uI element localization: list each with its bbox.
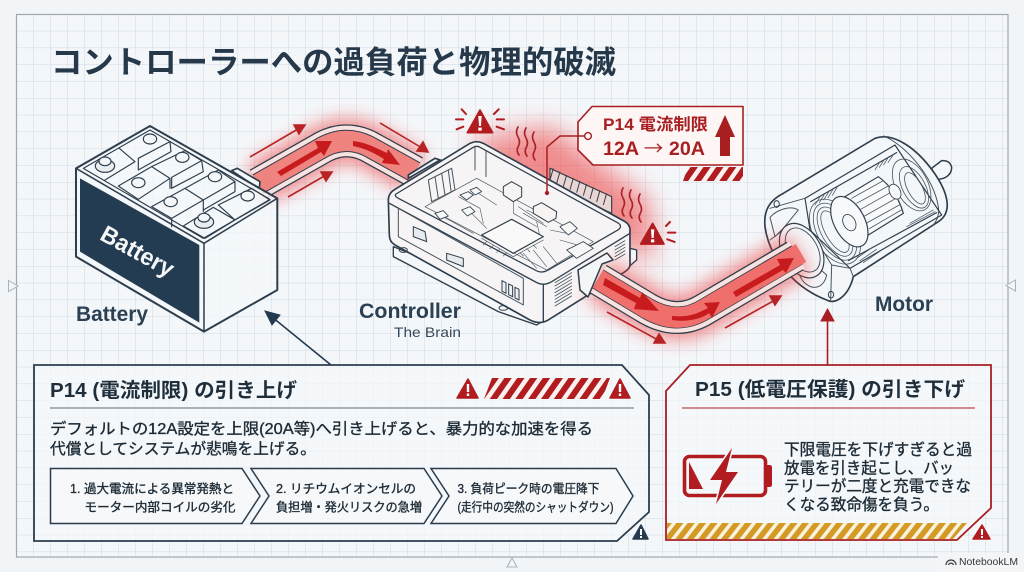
flow arrow: below first cable — [288, 172, 332, 197]
hazard stripes — [484, 378, 610, 399]
pin header — [428, 168, 455, 202]
step 1 chevron: 1. 過大電流による異常発熱と — [70, 482, 234, 496]
flow arrow: below second cable left — [607, 312, 665, 343]
callout line 2: 12A → 20A — [603, 134, 705, 161]
controller cable connector — [578, 253, 613, 297]
heat waves: top — [516, 127, 536, 160]
callout hazard stripes — [683, 167, 743, 181]
microchip — [482, 219, 543, 253]
arrow: panel to battery — [265, 311, 331, 365]
step 2 chevron: 2. リチウムイオンセルの — [276, 482, 416, 496]
step 3 chevron: 3. 負荷ピーク時の電圧降下 — [458, 482, 600, 496]
step 2 chevron — [251, 468, 442, 524]
watermark: NotebookLM — [938, 553, 1024, 572]
inner current arrow: first cable rising — [277, 141, 332, 176]
mounting ears — [399, 248, 407, 252]
warning icon right — [610, 379, 630, 398]
cable terminal — [232, 168, 260, 188]
circuit board — [425, 178, 593, 270]
battery cell blocks — [95, 134, 270, 238]
warning icon: P15 panel corner — [973, 525, 990, 539]
icon: depleted battery — [684, 448, 772, 504]
label: motor: Motor — [875, 293, 933, 316]
panel divider — [682, 407, 975, 409]
body text: 代償としてシステムが悲鳴を上げる。 — [50, 440, 316, 458]
arrow: panel to motor — [821, 309, 834, 365]
cable: controller to motor — [598, 253, 801, 321]
flow arrow: below second cable right — [725, 296, 781, 328]
flow arrow: above first cable — [250, 125, 305, 157]
hazard stripes — [667, 523, 967, 539]
warning icon left — [457, 379, 478, 398]
side ports — [413, 227, 463, 267]
controller — [388, 142, 637, 325]
panel heading: P14 (電流制限) の引き上げ — [50, 379, 297, 402]
panel divider — [50, 407, 634, 409]
body text: テリーが二度と充電できな — [784, 478, 971, 496]
callout line 1: P14 電流制限 — [603, 115, 709, 134]
warning icon: top — [456, 109, 504, 133]
edge marker: left — [8, 280, 18, 292]
motor cutaway window — [805, 145, 942, 268]
callout anchor dot — [545, 191, 549, 195]
warning icon: P14 panel corner — [633, 525, 648, 539]
motor back coil — [884, 153, 939, 217]
edge marker: right — [1006, 280, 1016, 291]
cable: battery to controller — [258, 141, 415, 184]
callout hole — [585, 133, 591, 139]
components — [503, 182, 522, 202]
motor rotor — [845, 177, 903, 235]
motor stator hatch — [815, 155, 935, 263]
panel heading: P15 (低電圧保護) の引き下げ — [695, 378, 965, 401]
vents — [555, 241, 625, 306]
label: controller: Controller — [359, 300, 461, 323]
motor front coil — [799, 190, 871, 273]
label: the brain: The Brain — [394, 324, 461, 340]
step 1 chevron: モーター内部コイルの劣化 — [84, 500, 236, 514]
battery — [76, 126, 277, 332]
motor shaft — [932, 161, 952, 180]
callout tag: P14 current limit — [545, 106, 743, 195]
motor — [765, 136, 952, 301]
step 3 chevron — [431, 468, 633, 524]
panel: P14 — [34, 365, 649, 541]
step 2 chevron: 負担増・発火リスクの急増 — [276, 500, 422, 514]
warning icon: right — [641, 222, 675, 244]
callout up arrow — [715, 115, 735, 156]
motor front plate — [770, 198, 853, 300]
terminal posts — [95, 134, 254, 228]
step 3 chevron: (走行中の突然のシャットダウン) — [458, 500, 614, 514]
body text: くなる致命傷を負う。 — [784, 496, 939, 514]
inner current arrow: second cable falling — [603, 278, 659, 311]
label: battery: Battery — [76, 303, 148, 326]
inner current arrow: second cable rising — [733, 258, 794, 297]
flow arrow: right of first cable — [380, 123, 428, 152]
heat glow around controller — [470, 125, 655, 262]
edge marker: bottom — [507, 558, 517, 567]
callout leader — [547, 136, 585, 193]
step 1 chevron — [50, 468, 260, 524]
heat waves: right — [622, 188, 642, 222]
title: コントローラーへの過負荷と物理的破滅 — [51, 44, 616, 80]
body text: 下限電圧を下げすぎると過 — [784, 441, 972, 459]
inner current arrow: first cable falling — [353, 141, 400, 165]
battery front plate — [80, 178, 199, 323]
watermark: NotebookLM: NotebookLM — [959, 556, 1018, 568]
battery plate label: Battery — [96, 221, 179, 283]
panel: P15 — [666, 365, 991, 540]
body text: デフォルトの12A設定を上限(20A等)へ引き上げると、暴力的な加速を得る — [50, 419, 593, 438]
inner current arrow: second cable flat — [672, 302, 720, 321]
body text: 放電を引き起こし、バッ — [784, 460, 954, 478]
